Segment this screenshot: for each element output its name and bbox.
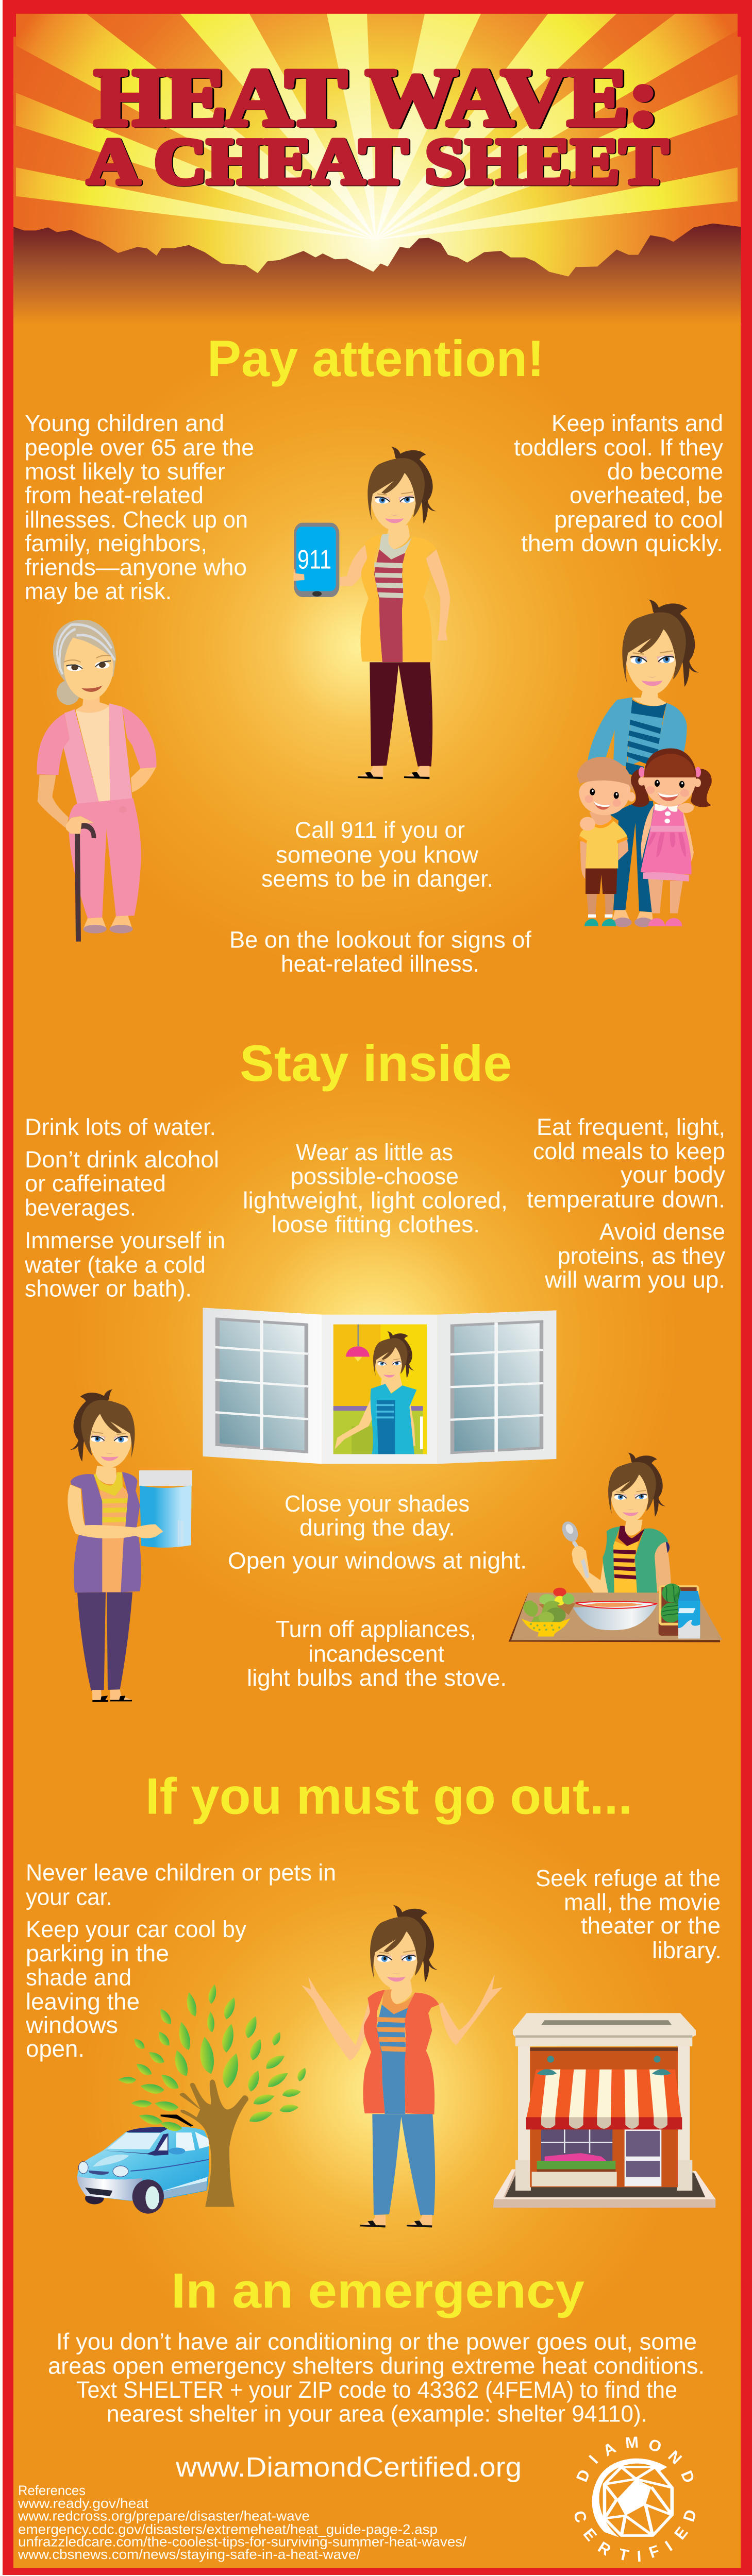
scorched mountain silhouette xyxy=(13,224,741,324)
bowl xyxy=(573,1601,657,1630)
text: keep infants: Keep infants and xyxy=(552,410,723,436)
text: emergency shelter info: areas open emergency shelters during extreme heat conditions. xyxy=(48,2352,705,2379)
text: call 911 xyxy=(261,817,493,892)
boy xyxy=(577,757,635,926)
text: young children: people over 65 are the xyxy=(25,434,254,461)
title: A CHEAT SHEET xyxy=(88,125,669,198)
illustration: tree with car xyxy=(77,1984,309,2214)
text: seek refuge: Seek refuge at the xyxy=(536,1865,721,1891)
text: keep infants: do become xyxy=(607,458,723,485)
text: young children: from heat-related xyxy=(25,481,204,508)
text: young children: Young children and xyxy=(25,410,224,436)
text: food tips: temperature down. xyxy=(527,1186,725,1212)
text: shades: Close your shades xyxy=(285,1490,470,1517)
milk carton xyxy=(678,1591,700,1639)
text: call 911: someone you know xyxy=(276,841,479,868)
text: emergency shelter info: If you don’t have air conditioning or the power goes out, some xyxy=(56,2328,697,2355)
text: food tips: proteins, as they xyxy=(558,1242,725,1269)
text: hydration tips: shower or bath). xyxy=(25,1275,192,1301)
text: appliances: Turn off appliances, xyxy=(276,1616,476,1642)
text: car tips: shade and xyxy=(26,1964,131,1991)
logo: diamond certified: I xyxy=(662,2537,676,2555)
text: car tips: your car. xyxy=(26,1884,112,1910)
text: shades: during the day. xyxy=(299,1514,455,1541)
figure: woman with raised arms xyxy=(302,1905,503,2228)
logo: diamond certified: A xyxy=(600,2438,619,2460)
title: HEAT WAVE: xyxy=(94,52,659,143)
text: emergency shelter info xyxy=(48,2328,705,2427)
logo: diamond certified xyxy=(570,2433,700,2565)
title: A CHEAT SHEET xyxy=(87,125,668,198)
text: clothing tip: Wear as little as xyxy=(296,1139,453,1165)
sunburst xyxy=(13,14,741,288)
girl xyxy=(631,749,712,926)
text: car tips: parking in the xyxy=(26,1940,169,1967)
salad colander xyxy=(522,1601,571,1637)
text: keep infants: prepared to cool xyxy=(554,506,723,533)
logo: diamond certified: E xyxy=(579,2525,600,2545)
text: seek refuge: mall, the movie xyxy=(564,1889,721,1915)
text: clothing tip xyxy=(243,1139,508,1238)
heading: if you must go out: If you must go out... xyxy=(145,1768,632,1825)
text: food tips: cold meals to keep xyxy=(533,1138,725,1164)
text: windows at night: Open your windows at night. xyxy=(228,1547,527,1573)
text: young children: family, neighbors, xyxy=(25,530,207,556)
text: seek refuge: theater or the xyxy=(581,1912,721,1939)
text: car tips: leaving the xyxy=(26,1988,140,2014)
text: seek refuge: library. xyxy=(652,1937,722,1963)
figure: woman with phone xyxy=(293,447,450,779)
text: young children: friends—anyone who xyxy=(25,554,247,580)
references: emergency.cdc.gov/disasters/extremeheat/heat_guide-page-2.asp xyxy=(18,2522,438,2537)
text: hydration tips: Immerse yourself in xyxy=(25,1227,225,1253)
text: shades xyxy=(285,1490,470,1541)
text: hydration tips: beverages. xyxy=(25,1194,136,1221)
text: food tips: will warm you up. xyxy=(544,1266,725,1293)
background glows xyxy=(13,328,741,2402)
illustration: storefront xyxy=(493,2013,715,2208)
text: appliances: incandescent xyxy=(308,1640,444,1667)
text: lookout xyxy=(229,926,531,977)
references: References xyxy=(18,2483,86,2498)
text: young children: most likely to suffer xyxy=(25,458,225,485)
logo: diamond certified: M xyxy=(625,2433,639,2452)
text: young children: may be at risk. xyxy=(25,578,172,604)
title: HEAT WAVE: xyxy=(96,53,660,143)
text: seek refuge xyxy=(536,1865,722,1963)
text: hydration tips xyxy=(24,1113,225,1301)
logo: diamond certified: T xyxy=(617,2545,630,2565)
logo: diamond certified: F xyxy=(646,2541,662,2562)
fruit basket xyxy=(539,1588,576,1615)
text: hydration tips: Don’t drink alcohol xyxy=(25,1146,219,1173)
icon: phone showing 911: 911 xyxy=(297,545,331,574)
text: car tips: Never leave children or pets in xyxy=(26,1859,336,1886)
text: lookout: Be on the lookout for signs of xyxy=(229,926,531,953)
references: unfrazzledcare.com/the-coolest-tips-for-surviving-summer-heat-waves/ xyxy=(18,2534,467,2549)
text: lookout: heat-related illness. xyxy=(281,950,479,977)
text: call 911: Call 911 if you or xyxy=(295,817,465,843)
illustration: open window with woman xyxy=(203,1308,556,1464)
heading: in an emergency: In an emergency xyxy=(171,2263,584,2318)
figure: woman with glass of water xyxy=(68,1389,192,1702)
text: keep infants xyxy=(514,410,723,556)
text: car tips: windows xyxy=(25,2011,118,2038)
icon: phone showing 911 xyxy=(293,523,339,597)
logo: diamond certified: D xyxy=(677,2468,698,2485)
car xyxy=(77,2115,209,2214)
text: food tips: Eat frequent, light, xyxy=(537,1113,725,1140)
logo: diamond certified: N xyxy=(664,2447,686,2468)
text: emergency shelter info: nearest shelter in your area (example: shelter 94110). xyxy=(107,2400,647,2427)
text: food tips xyxy=(527,1113,725,1293)
logo: diamond certified: D xyxy=(679,2507,700,2524)
figure: woman at table with meal xyxy=(509,1453,723,1642)
text: clothing tip: loose fitting clothes. xyxy=(272,1211,480,1238)
text: appliances xyxy=(247,1616,507,1691)
text: young children xyxy=(25,410,254,604)
text: hydration tips: Drink lots of water. xyxy=(25,1113,216,1140)
text: car tips xyxy=(25,1859,336,2062)
text: emergency shelter info: Text SHELTER + your ZIP code to 43362 (4FEMA) to find the xyxy=(76,2376,677,2403)
text: food tips: Avoid dense xyxy=(599,1218,725,1245)
logo: diamond certified: E xyxy=(671,2523,692,2543)
website url: www.DiamondCertified.org xyxy=(175,2452,522,2483)
text: hydration tips: water (take a cold xyxy=(24,1251,206,1278)
text: car tips: Keep your car cool by xyxy=(26,1916,246,1942)
text: clothing tip: possible-choose xyxy=(291,1163,459,1190)
tree trunk xyxy=(179,2079,248,2207)
text: car tips: open. xyxy=(26,2035,85,2062)
logo: diamond certified: C xyxy=(570,2509,591,2525)
tree leaves xyxy=(118,1984,309,2127)
text: hydration tips: or caffeinated xyxy=(25,1170,166,1197)
references: www.ready.gov/heat xyxy=(18,2496,149,2511)
references: www.redcross.org/prepare/disaster/heat-wave xyxy=(18,2509,310,2524)
references: www.cbsnews.com/news/staying-safe-in-a-heat-wave/ xyxy=(18,2547,361,2562)
logo: diamond certified: R xyxy=(595,2538,614,2559)
text: appliances: light bulbs and the stove. xyxy=(247,1664,507,1691)
heading: pay attention: Pay attention! xyxy=(207,330,544,387)
text: keep infants: overheated, be xyxy=(570,481,723,508)
heading: stay inside: Stay inside xyxy=(240,1035,512,1092)
title xyxy=(87,52,669,198)
figure: grandmother with cane xyxy=(37,620,157,942)
text: keep infants: toddlers cool. If they xyxy=(514,434,723,461)
watermelon box xyxy=(659,1583,699,1636)
figure: mother with two children xyxy=(577,600,712,927)
logo: diamond certified: D xyxy=(573,2467,594,2484)
references xyxy=(18,2483,467,2562)
text: keep infants: them down quickly. xyxy=(521,530,723,556)
logo: diamond certified: I xyxy=(586,2452,601,2467)
text: food tips: your body xyxy=(621,1161,725,1188)
text: young children: illnesses. Check up on xyxy=(25,506,248,533)
logo: diamond certified: I xyxy=(637,2547,642,2565)
logo: diamond certified: O xyxy=(646,2435,664,2456)
text: clothing tip: lightweight, light colored, xyxy=(243,1187,508,1213)
text: call 911: seems to be in danger. xyxy=(261,865,493,892)
